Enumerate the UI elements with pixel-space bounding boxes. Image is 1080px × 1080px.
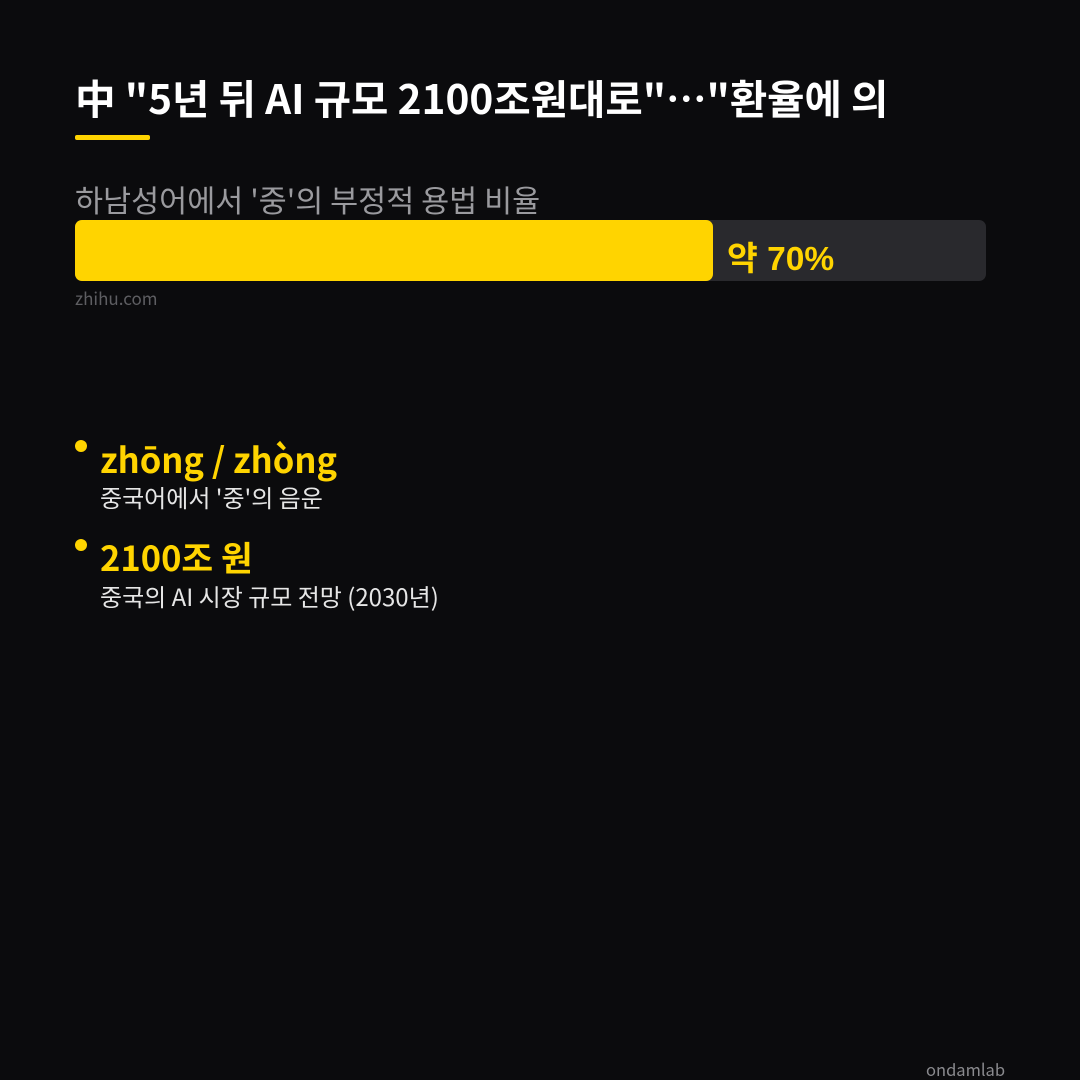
item 1 bbox=[75, 433, 337, 514]
bullet dot bbox=[75, 539, 87, 551]
item heading: 2100조 원 bbox=[100, 531, 253, 581]
item desc: 중국어에서 '중'의 음운 bbox=[100, 479, 323, 514]
bar fill bbox=[75, 220, 713, 281]
subtitle: 하남성어에서 '중'의 부정적 용법 비율 bbox=[75, 177, 540, 221]
item heading: zhōng / zhòng bbox=[100, 433, 337, 483]
bar chart bbox=[75, 220, 986, 281]
item desc: 중국의 AI 시장 규모 전망 (2030년) bbox=[100, 578, 439, 613]
title underline bbox=[75, 135, 150, 140]
source: zhihu.com bbox=[75, 285, 158, 310]
title: 中 "5년 뒤 AI 규모 2100조원대로"…"환율에 의 bbox=[75, 67, 888, 126]
item 2 bbox=[75, 531, 439, 613]
bullet dot bbox=[75, 440, 87, 452]
bar value: 약 70% bbox=[727, 241, 834, 278]
